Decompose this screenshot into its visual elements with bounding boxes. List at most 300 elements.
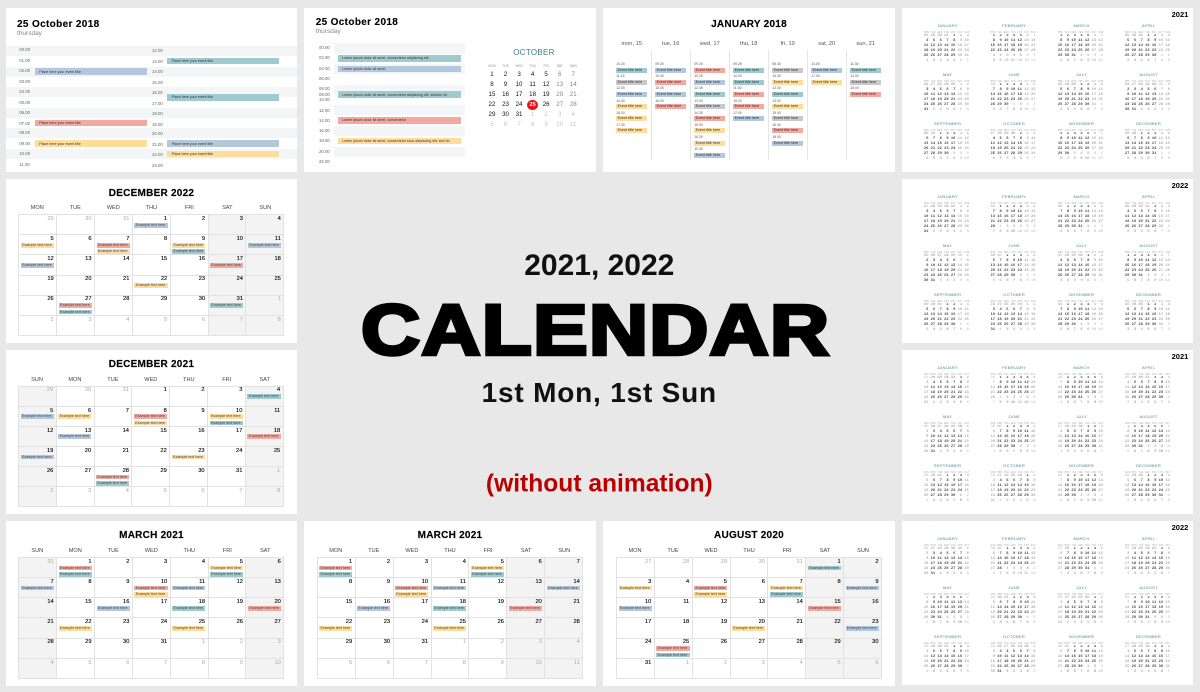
month: June: SUN MON TUE WED THU FRI SAT: [990, 422, 1036, 425]
event bar: Place here your event title: [39, 70, 81, 74]
month grid: 1: [202, 639, 205, 645]
month grid: 11: [199, 579, 205, 585]
month: January: JANUARY: [937, 365, 958, 370]
weekday row: SAT: [521, 548, 531, 554]
month grid: 14: [796, 599, 803, 605]
month grid: Example text here: [98, 606, 128, 610]
subheading: weekday: thursday: [17, 30, 42, 37]
central title block: [361, 249, 831, 498]
month grid: 24: [236, 448, 242, 454]
month grid: 28: [123, 296, 129, 302]
month grid: Example text here: [135, 414, 165, 418]
panel: 2021 year view, Monday first: [902, 8, 1193, 172]
month: August: 1 2 3 4 5 6 7 8 9 10 11 12 13 14 15 16 17 18 19 20 21 22 23 24 25 26 27 28 29 30 31 1 2 3 4 5 6 7 8 9 10 11: [1125, 425, 1172, 454]
month grid: 31: [47, 559, 54, 565]
month grid: 18: [274, 428, 280, 434]
mini calendar dates: 5: [490, 121, 494, 128]
month grid: 18: [199, 599, 205, 605]
time labels: 06.00: [319, 76, 330, 81]
month: September: SUN MON TUE WED THU FRI SAT: [924, 642, 969, 645]
month grid: 7: [425, 660, 428, 666]
month grid: 6: [202, 316, 205, 322]
month: May: MON TUE WED THU FRI SAT SUN: [924, 80, 969, 83]
month grid: 7: [577, 559, 580, 565]
month: March: MARCH: [1074, 536, 1090, 541]
month grid: 22: [85, 619, 92, 625]
events: thursday: 15.00: [733, 99, 742, 103]
month grid: 25: [274, 276, 281, 282]
weekday row: TUE: [70, 205, 81, 211]
year label: 2021: [1172, 352, 1188, 360]
time labels: morning: 10.00: [19, 151, 30, 156]
month: February: 1 2 3 4 5 6 7 8 9 10 11 12 13 14 15 16 17 18 19 20 21 22 23 24 25 26 27 28 1 2 3 4 5 6 7 8 9 10 11 12 13 14: [990, 34, 1038, 63]
events: sunday: Event title here: [852, 68, 876, 72]
month grid: 19: [47, 276, 54, 282]
note: without animation: (without animation): [486, 470, 713, 498]
month grid: 12: [47, 428, 53, 434]
month: March: [1058, 536, 1105, 581]
month: June: SUN MON TUE WED THU FRI SAT: [990, 593, 1036, 596]
events: tuesday: Event title here: [657, 80, 681, 84]
month grid: 13: [274, 579, 281, 585]
month grid: 9: [501, 660, 504, 666]
month grid: 14: [123, 256, 129, 262]
month: April: APRIL: [1142, 194, 1155, 199]
month: August: AUGUST: [1139, 72, 1158, 77]
month: January: SUN MON TUE WED THU FRI SAT: [924, 544, 969, 547]
month: June: MON TUE WED THU FRI SAT SUN: [990, 80, 1036, 83]
time labels: afternoon: 22.00: [152, 152, 163, 157]
month: August: MON TUE WED THU FRI SAT SUN: [1125, 80, 1170, 83]
events: monday: 14.40: [616, 99, 625, 103]
month grid: 13: [85, 428, 91, 434]
month grid: Example text here: [135, 421, 165, 425]
events: friday: Event title here: [774, 92, 798, 96]
month: June: 30 31 1 2 3 4 5 6 7 8 9 10 11 12 13 14 15 16 17 18 19 20 21 22 23 24 25 26 27 28 29 30 1 2 3 4 5 6 7 8 9 10: [990, 425, 1038, 454]
month: November: NOVEMBER: [1069, 463, 1094, 468]
weekday row: SUN: [259, 205, 271, 211]
weekday row: WED: [145, 548, 158, 554]
month grid: 15: [161, 256, 167, 262]
weekday row: [628, 548, 869, 554]
month grid: 29: [85, 639, 92, 645]
month: September: SUN MON TUE WED THU FRI SAT: [924, 471, 969, 474]
month: September: SEPTEMBER: [934, 634, 961, 639]
month: February: FEBRUARY: [1002, 23, 1026, 28]
month: July: [1058, 585, 1105, 630]
month grid: 27: [85, 468, 91, 474]
month grid: 31: [796, 559, 803, 565]
events: thursday: Event title here: [735, 116, 759, 120]
event bar: Lorem ipsum dolor sit amet, consectetur adipiscing elit.: [342, 56, 429, 60]
month grid: 5: [164, 488, 167, 494]
month grid: Example text here: [22, 243, 52, 247]
events: tuesday: 16.00: [655, 99, 664, 103]
month grid: 30: [384, 639, 390, 645]
month grid: 27: [759, 639, 765, 645]
month grid: Example text here: [548, 586, 578, 590]
time labels: afternoon: 18.00: [152, 111, 163, 116]
events: monday: Event title here: [618, 80, 642, 84]
events: thursday: Event title here: [735, 92, 759, 96]
weekday row: SUN: [31, 377, 43, 383]
month: March: 28 1 2 3 4 5 6 7 8 9 10 11 12 13 14 15 16 17 18 19 20 21 22 23 24 25 26 27 28 29 30 31 1 2 3 4 5 6 7 8 9 10: [1058, 376, 1105, 405]
time labels: afternoon: 19.00: [152, 122, 163, 127]
month grid: 30: [759, 559, 765, 565]
weekday row: THU: [184, 548, 195, 554]
event bar: Place here your event title: [39, 121, 81, 125]
month grid: 26: [47, 468, 53, 474]
month: February: FEBRUARY: [1002, 194, 1026, 199]
panel: August 2020 month view: [603, 521, 895, 686]
month: September: MON TUE WED THU FRI SAT SUN: [924, 129, 969, 132]
month: June: 29 30 31 1 2 3 4 5 6 7 8 9 10 11 12 13 14 15 16 17 18 19 20 21 22 23 24 25 26 27 28 29 30 1 2 3 4 5 6 7 8 9: [990, 596, 1038, 625]
month: August: 26 27 28 29 30 31 1 2 3 4 5 6 7 8 9 10 11 12 13 14 15 16 17 18 19 20 21 22 23 24 25 26 27 28 29 30 31 1 2 3 4 5: [1125, 83, 1172, 112]
events: sunday: 11.30: [850, 62, 859, 66]
month: December: 28 29 30 1 2 3 4 5 6 7 8 9 10 11 12 13 14 15 16 17 18 19 20 21 22 23 24 25 26 27 28 29 30 31 1 2 3 4 5 6 7 8: [1125, 303, 1172, 332]
month grid: 12: [721, 599, 727, 605]
month: August: AUGUST: [1139, 585, 1158, 590]
weekday row: FRI: [484, 548, 493, 554]
mini calendar dates: 22: [489, 101, 495, 108]
month: February: [990, 536, 1038, 581]
weekday row: MON: [628, 548, 642, 554]
mini calendar weekday row: FRI: [543, 64, 549, 68]
month: December: DECEMBER: [1136, 634, 1161, 639]
mini calendar dates: 16: [502, 91, 509, 98]
subheading: weekday: thursday: [316, 28, 341, 35]
events: thursday: Event title here: [735, 104, 759, 108]
panel: daily schedule with month: [304, 8, 596, 172]
month: February: SUN MON TUE WED THU FRI SAT: [990, 373, 1036, 376]
month: October: [990, 634, 1038, 679]
weekday header: thu: thu, 18: [740, 40, 757, 46]
month: August: AUGUST: [1139, 243, 1158, 248]
month grid: 23: [198, 448, 205, 454]
month grid: 23: [123, 619, 129, 625]
month: April: 27 28 29 30 31 1 2 3 4 5 6 7 8 9 10 11 12 13 14 15 16 17 18 19 20 21 22 23 24 25 26 27 28 29 30 1 2 3 4 5 6 7: [1125, 547, 1172, 576]
month: May: 1 2 3 4 5 6 7 8 9 10 11 12 13 14 15 16 17 18 19 20 21 22 23 24 25 26 27 28 29 30 31 1 2 3 4 5 6 7 8 9 10 11: [924, 596, 971, 625]
month: February: [990, 365, 1038, 410]
month grid: 31: [123, 387, 129, 393]
month grid: 20: [759, 619, 765, 625]
heading: month: AUGUST 2020: [714, 530, 784, 540]
time labels: afternoon: 20.00: [152, 131, 163, 136]
weekday row: TUE: [107, 377, 118, 383]
month grid: 1: [837, 559, 841, 565]
weekday header: sun: sun, 21: [856, 40, 875, 46]
month grid: 15: [160, 428, 167, 434]
month grid: Example text here: [174, 626, 203, 630]
month grid: 8: [164, 408, 167, 414]
month grid: 12: [237, 579, 243, 585]
month: April: [1125, 365, 1172, 410]
month grid: 20: [536, 599, 542, 605]
month: January: MON TUE WED THU FRI SAT SUN: [924, 31, 969, 34]
month: July: 28 29 30 1 2 3 4 5 6 7 8 9 10 11 12 13 14 15 16 17 18 19 20 21 22 23 24 25 26 27 28 29 30 31 1 2 3 4 5 6 7 8: [1058, 83, 1105, 112]
month: September: MON TUE WED THU FRI SAT SUN: [924, 300, 969, 303]
panel: weekly schedule: [603, 8, 895, 172]
time labels: 04.00: [319, 66, 330, 71]
month grid: 25: [683, 639, 689, 645]
month grid: 21: [796, 619, 803, 625]
time labels: morning: 08.00: [19, 130, 30, 135]
events: monday: 10.20: [616, 62, 625, 66]
time labels: morning: 01.00: [19, 58, 30, 63]
month grid: 4: [126, 488, 129, 494]
month grid: 24: [422, 619, 428, 625]
month: January: SUN MON TUE WED THU FRI SAT: [924, 373, 969, 376]
month: December: [1125, 292, 1172, 337]
month grid: Example text here: [60, 414, 89, 418]
mini calendar dates: 9: [504, 81, 507, 88]
month: July: MON TUE WED THU FRI SAT SUN: [1058, 80, 1103, 83]
time labels: morning: 09.00: [19, 141, 30, 146]
mini calendar dates: 26: [543, 101, 550, 108]
month grid: 26: [237, 619, 243, 625]
heading: month: DECEMBER 2022: [109, 188, 194, 198]
events: wednesday: 15.00: [694, 123, 703, 127]
month grid: 31: [645, 660, 651, 666]
month grid: 16: [198, 428, 205, 434]
events: wednesday: 19.30: [694, 147, 703, 151]
month: November: SUN MON TUE WED THU FRI SAT: [1058, 642, 1103, 645]
month grid: 16: [872, 599, 878, 605]
month: November: 31 1 2 3 4 5 6 7 8 9 10 11 12 13 14 15 16 17 18 19 20 21 22 23 24 25 26 27 28 29 30 1 2 3 4 5 6 7 8 9 10 11: [1058, 303, 1105, 332]
month grid: 11: [275, 236, 281, 242]
mini calendar dates: 2: [504, 71, 507, 78]
month grid: 17: [645, 619, 651, 625]
month grid: 13: [759, 599, 765, 605]
month grid: 7: [126, 408, 129, 414]
month grid: 4: [202, 559, 205, 565]
month: November: 31 1 2 3 4 5 6 7 8 9 10 11 12 13 14 15 16 17 18 19 20 21 22 23 24 25 26 27 28 29 30 1 2 3 4 5 6 7 8 9 10 11: [1058, 474, 1105, 503]
month: November: 1 2 3 4 5 6 7 8 9 10 11 12 13 14 15 16 17 18 19 20 21 22 23 24 25 26 27 28 29 30 1 2 3 4 5 6 7 8 9 10 11 12: [1058, 132, 1105, 161]
time labels: 14.00: [319, 118, 330, 123]
month: February: MON TUE WED THU FRI SAT SUN: [990, 202, 1036, 205]
month grid: 4: [50, 660, 54, 666]
month: November: NOVEMBER: [1069, 121, 1094, 126]
month grid: 25: [274, 448, 280, 454]
event bar: Place here your event title: [172, 142, 213, 146]
month: October: [990, 463, 1038, 508]
events: wednesday: [694, 62, 725, 158]
month grid: 5: [88, 660, 92, 666]
month grid: 20: [85, 448, 91, 454]
month: May: 26 27 28 29 30 1 2 3 4 5 6 7 8 9 10 11 12 13 14 15 16 17 18 19 20 21 22 23 24 25 26 27 28 29 30 31 1 2 3 4 5 6: [924, 83, 971, 112]
month grid: 2: [501, 639, 504, 645]
month grid: 8: [202, 660, 205, 666]
time labels: afternoon: 23.00: [152, 163, 163, 168]
mini calendar dates: 7: [517, 121, 521, 128]
weekday row: WED: [405, 548, 418, 554]
events: monday: Event title here: [618, 68, 642, 72]
month grid: 6: [539, 559, 542, 565]
panel: March 2021 month view, Sunday first: [6, 521, 297, 686]
month: August: SUN MON TUE WED THU FRI SAT: [1125, 593, 1170, 596]
month: April: 28 29 30 31 1 2 3 4 5 6 7 8 9 10 11 12 13 14 15 16 17 18 19 20 21 22 23 24 25 26 27 28 29 30 1 2 3 4 5 6 7 8: [1125, 205, 1172, 234]
month grid: Example text here: [174, 249, 203, 253]
month grid: 6: [387, 660, 390, 666]
month grid: 8: [88, 579, 92, 585]
month grid: Example text here: [60, 572, 90, 576]
heading: month: MARCH 2021: [119, 530, 184, 541]
events: saturday: Event title here: [813, 68, 837, 72]
month grid: [18, 214, 284, 336]
events: thursday: 09.25: [733, 62, 742, 66]
month: December: 28 29 30 1 2 3 4 5 6 7 8 9 10 11 12 13 14 15 16 17 18 19 20 21 22 23 24 25 26 27 28 29 30 31 1 2 3 4 5 6 7 8: [1125, 474, 1172, 503]
month grid: 28: [573, 619, 580, 625]
events: monday: Event title here: [618, 128, 642, 132]
month: May: MAY: [943, 585, 952, 590]
time labels: 18.00: [319, 138, 330, 143]
weekday row: TUE: [368, 548, 379, 554]
event bar: [338, 66, 461, 72]
events: tuesday: 15.30: [655, 86, 664, 90]
event bar: [338, 91, 461, 98]
events: friday: 10.30: [772, 74, 781, 78]
month: March: SUN MON TUE WED THU FRI SAT: [1058, 373, 1103, 376]
month grid: 31: [161, 639, 167, 645]
time labels: 10.00: [319, 97, 330, 102]
heading: month: JANUARY 2018: [711, 19, 787, 30]
mini calendar dates: 8: [531, 121, 534, 128]
month grid: Example text here: [249, 243, 279, 247]
mini calendar dates: 3: [558, 111, 561, 118]
month grid: Example text here: [320, 572, 350, 576]
event bar: Place here your event title: [39, 142, 81, 146]
month grid: Example text here: [658, 653, 687, 657]
month: February: MON TUE WED THU FRI SAT SUN: [990, 31, 1036, 34]
month grid: 23: [384, 619, 390, 625]
month: May: [924, 585, 971, 630]
events: monday: 11.15: [616, 74, 625, 78]
month grid: 6: [126, 660, 129, 666]
events: thursday: Event title here: [735, 80, 759, 84]
month: June: 30 31 1 2 3 4 5 6 7 8 9 10 11 12 13 14 15 16 17 18 19 20 21 22 23 24 25 26 27 28 29 30 1 2 3 4 5 6 7 8 9 10: [990, 254, 1038, 283]
mini calendar dates: 25: [529, 102, 536, 108]
month grid: 31: [236, 468, 242, 474]
weekday header: mon: mon, 15: [621, 40, 642, 46]
weekday row: THU: [146, 205, 157, 211]
month grid: Example text here: [434, 586, 464, 590]
weekday row: SAT: [260, 548, 271, 554]
month: October: MON TUE WED THU FRI SAT SUN: [990, 300, 1036, 303]
year label: 2022: [1172, 522, 1188, 532]
events: monday: 17.30: [616, 123, 625, 127]
events: monday: 12.00: [616, 86, 625, 90]
events: monday: 16.00: [616, 111, 625, 115]
month grid: 5: [349, 660, 352, 666]
month grid: 12: [498, 579, 504, 585]
month: August: SUN MON TUE WED THU FRI SAT: [1125, 422, 1170, 425]
events: tuesday: Event title here: [657, 104, 681, 108]
events: friday: Event title here: [774, 68, 798, 72]
month: October: 25 26 27 28 29 30 1 2 3 4 5 6 7 8 9 10 11 12 13 14 15 16 17 18 19 20 21 22 23 24 25 26 27 28 29 30 31 1 2 3 4 5: [990, 645, 1038, 674]
event bar: Place here your event title: [172, 95, 213, 99]
month grid: 24: [161, 619, 167, 625]
month: March: MARCH: [1074, 23, 1090, 28]
month: March: [1058, 365, 1105, 410]
month: July: JULY: [1076, 585, 1087, 590]
mini calendar weekday row: TUE: [502, 64, 509, 68]
month grid: 28: [683, 559, 689, 565]
events: friday: 08.30: [772, 62, 781, 66]
month grid: Example text here: [174, 586, 203, 590]
month: November: [1058, 292, 1105, 337]
month grid: 2: [126, 559, 129, 565]
month: November: [1058, 634, 1105, 679]
month grid: 26: [47, 296, 54, 302]
month grid: 31: [237, 296, 243, 302]
mini calendar dates: 28: [570, 101, 577, 108]
month grid: Example text here: [22, 414, 52, 418]
month: April: SUN MON TUE WED THU FRI SAT: [1125, 544, 1170, 547]
month: June: JUNE: [1008, 414, 1020, 419]
month grid: Example text here: [174, 243, 203, 247]
events: wednesday: 16.20: [694, 135, 703, 139]
month grid: 29: [721, 559, 727, 565]
mini calendar heading: OCTOBER: [513, 48, 555, 57]
month grid: 19: [498, 599, 504, 605]
weekday row: FRI: [185, 205, 194, 211]
events: thursday: [733, 62, 764, 121]
month grid: 2: [724, 660, 727, 666]
month: March: 27 28 1 2 3 4 5 6 7 8 9 10 11 12 13 14 15 16 17 18 19 20 21 22 23 24 25 26 27 28 29 30 31 1 2 3 4 5 6 7 8 9: [1058, 547, 1105, 576]
month grid: 12: [47, 256, 54, 262]
mini calendar dates: 21: [570, 91, 577, 98]
month grid: 8: [164, 236, 167, 242]
events: friday: 15.00: [772, 111, 781, 115]
panel: December 2022 month view: [6, 179, 297, 343]
month grid: Example text here: [211, 303, 241, 307]
events: sunday: 13.00: [850, 74, 859, 78]
mini calendar dates: [488, 71, 577, 128]
month: September: 29 30 31 1 2 3 4 5 6 7 8 9 10 11 12 13 14 15 16 17 18 19 20 21 22 23 24 25 26 27 28 29 30 1 2 3 4 5 6 7 8 9: [924, 474, 971, 503]
time labels: 22.00: [319, 159, 330, 164]
month grid: 9: [875, 579, 878, 585]
events: wednesday: 13.00: [694, 99, 703, 103]
month: January: MON TUE WED THU FRI SAT SUN: [924, 202, 969, 205]
month grid: 5: [50, 408, 53, 414]
month grid: 10: [274, 660, 281, 666]
year label: 2022: [1172, 180, 1188, 190]
month grid: Example text here: [97, 475, 127, 479]
month: November: NOVEMBER: [1069, 634, 1094, 639]
month: March: MON TUE WED THU FRI SAT SUN: [1058, 31, 1103, 34]
events: wednesday: Event title here: [696, 68, 720, 72]
month grid: Example text here: [434, 606, 464, 610]
month grid: 9: [387, 579, 390, 585]
time labels: afternoon: 12.00: [152, 48, 163, 53]
heading: month: MARCH 2021: [418, 530, 482, 541]
month: October: 26 27 28 29 30 1 2 3 4 5 6 7 8 9 10 11 12 13 14 15 16 17 18 19 20 21 22 23 24 25 26 27 28 29 30 31 1 2 3 4 5 6: [990, 474, 1038, 503]
month grid: 5: [724, 579, 727, 585]
month grid: 2: [240, 639, 243, 645]
month: December: SUN MON TUE WED THU FRI SAT: [1125, 642, 1170, 645]
month grid: Example text here: [847, 626, 877, 630]
month grid: 29: [47, 387, 53, 393]
mini calendar weekday row: SAT: [557, 64, 563, 68]
month grid: Example text here: [136, 283, 165, 287]
month: December: DECEMBER: [1136, 463, 1161, 468]
events: saturday: 14.00: [811, 62, 820, 66]
month: June: JUNE: [1008, 243, 1020, 248]
month: April: [1125, 536, 1172, 581]
events: wednesday: 10.20: [694, 74, 703, 78]
mini calendar dates: 8: [490, 81, 494, 88]
month grid: Example text here: [809, 606, 839, 610]
